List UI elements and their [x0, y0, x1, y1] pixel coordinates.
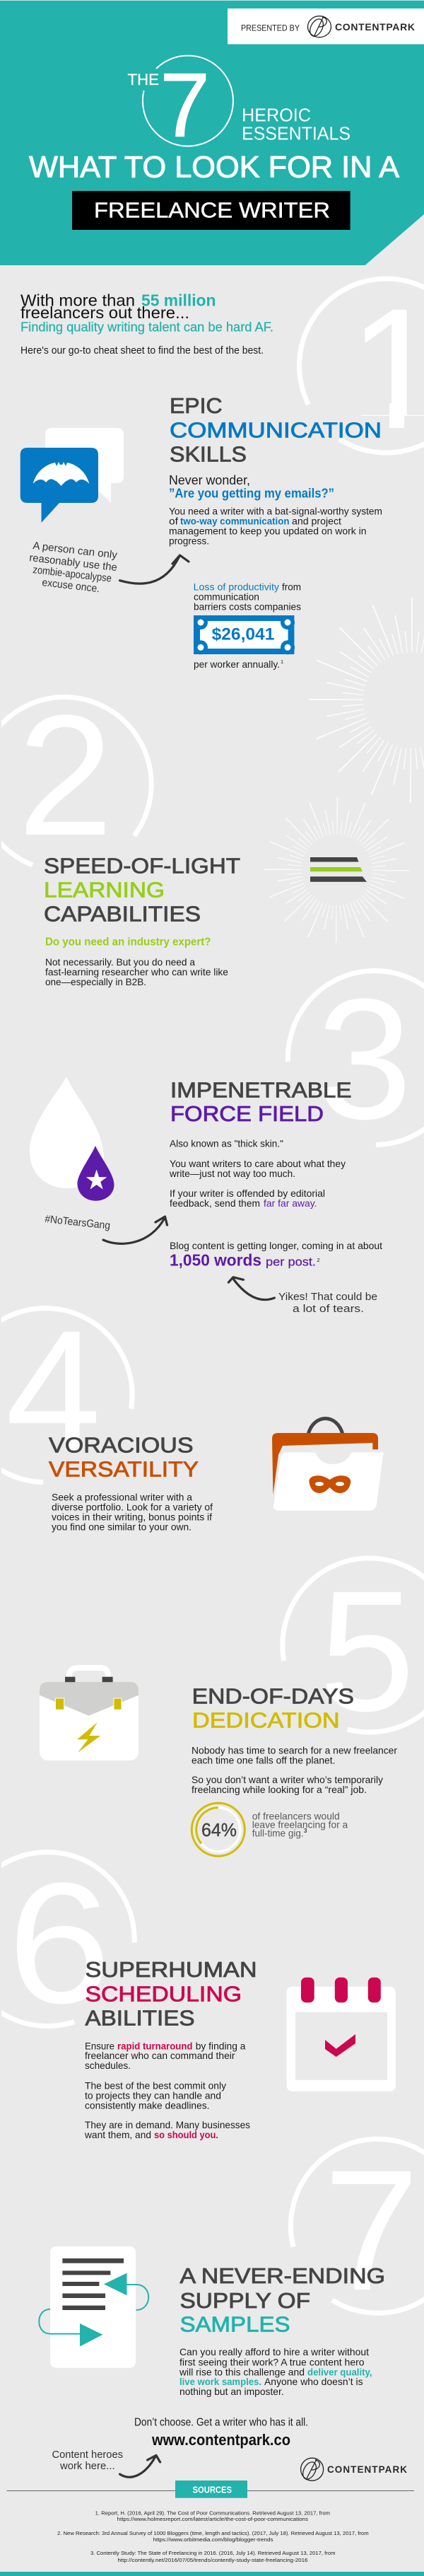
background sunburst two [283, 816, 391, 924]
body text: You need a writer with a bat-signal-worthy system [169, 505, 382, 516]
section 4: voracious versatility [49, 1419, 384, 1533]
heading [170, 393, 382, 466]
heading: SKILLS [170, 441, 247, 466]
source list: https://www.orbitmedia.com/blog/blogger-trends [153, 2536, 273, 2543]
subheading: Never wonder, [169, 473, 250, 487]
stat: blog post length [170, 1240, 382, 1269]
header banner [0, 0, 424, 265]
stat: loss of productivity: from [282, 581, 301, 592]
heading [192, 1683, 354, 1733]
background numeral 5 [283, 1555, 424, 1747]
stat: 64 percent ring: of freelancers would [252, 1811, 340, 1822]
heading: VERSATILITY [49, 1457, 199, 1482]
background sunburst one [336, 625, 424, 775]
intro text: With more than [20, 291, 135, 309]
heading: END-OF-DAYS [192, 1683, 354, 1708]
sources label: SOURCES [192, 2485, 232, 2495]
intro text: 55 million [141, 291, 216, 309]
body text: and project [292, 515, 341, 526]
body text: freelancing while looking for a “real” job. [192, 1784, 367, 1795]
body text [169, 1138, 346, 1209]
icon: speed lines [310, 857, 367, 882]
heading: A NEVER-ENDING [179, 2263, 385, 2288]
call to action [52, 2416, 407, 2481]
body text: Ensure [85, 2040, 114, 2051]
heading: CAPABILITIES [44, 902, 201, 927]
body text: two-way communication [180, 515, 290, 526]
sources [7, 2481, 414, 2563]
body text: you find one similar to your own. [52, 1521, 192, 1533]
body text: far far away. [264, 1197, 317, 1209]
footer bar [0, 2572, 424, 2576]
stat: 64 percent ring [187, 1799, 348, 1860]
heading: VORACIOUS [49, 1432, 194, 1457]
heading [170, 1078, 352, 1126]
body text: of [169, 515, 178, 526]
icon: contentpark logo [307, 16, 331, 38]
body text [179, 2346, 372, 2397]
section 6: superhuman scheduling abilities [84, 1957, 396, 2140]
section 3: impenetrable force field [30, 1077, 382, 1315]
handwritten note [278, 1291, 377, 1315]
body text: consistently make deadlines. [85, 2099, 209, 2111]
title: freelance writer [72, 191, 351, 230]
body text [45, 956, 228, 987]
icon: contentpark logo: CONTENTPARK [327, 2464, 407, 2475]
source list: 1. Report, H. (2016, April 29). The Cost of Poor Communications. Retrieved August 13, 2017, from [95, 2510, 330, 2517]
body text: write—just not way too much. [169, 1168, 295, 1179]
body text: Nobody has time to search for a new freelancer [192, 1744, 397, 1756]
icon: calendar with check mark [287, 1978, 396, 2091]
stat: loss of productivity: communication [194, 591, 259, 602]
presented by badge [228, 8, 424, 44]
handwritten note [29, 540, 118, 595]
body text: Not necessarily. But you do need a [45, 956, 195, 968]
background numeral 6: 6 [7, 1847, 111, 2039]
handwritten note: A person can only [33, 540, 118, 562]
handwritten note: work here... [59, 2460, 115, 2472]
title: freelance writer: FREELANCE WRITER [94, 197, 330, 222]
stat: blog post length: Blog content is getting longer, coming in at about [170, 1240, 382, 1251]
body text: If your writer is offended by editorial [170, 1188, 325, 1199]
intro text: Here's our go-to cheat sheet to find the best of the best. [20, 345, 264, 356]
source list: 3. Contently Study: The State of Freelancing in 2016. (2016, July 14). Retrieved August 13, 2017, from [90, 2550, 335, 2556]
presented by badge: PRESENTED BY [241, 23, 300, 33]
icon: banknote with amount: $26,041 [212, 625, 274, 644]
heading: LEARNING [44, 877, 165, 902]
stat: loss of productivity: per worker annually. [194, 658, 280, 670]
body text: first seeing their work? A true content hero [179, 2357, 365, 2368]
call to action: www.contentpark.co [151, 2431, 290, 2449]
handwritten note: reasonably use the [29, 552, 118, 574]
body text: Also known as "thick skin." [170, 1138, 283, 1149]
handwritten note: zombie-apocalypse [33, 564, 112, 585]
heading: SUPERHUMAN [85, 1957, 257, 1982]
stat: loss of productivity: barriers costs companies [194, 601, 301, 612]
heading: SAMPLES [179, 2311, 290, 2337]
arrow [103, 1217, 167, 1243]
icon: contentpark logo [300, 2458, 407, 2481]
heading: ABILITIES [85, 2006, 195, 2031]
body text: rapid turnaround [117, 2040, 192, 2051]
source list: http://contently.net/2016/07/05/trends/contently-study-state-freelancing-2016 [117, 2557, 308, 2563]
handwritten note: Content heroes [52, 2449, 123, 2461]
body text: one—especially in B2B. [45, 976, 146, 987]
handwritten note: a lot of tears. [293, 1303, 364, 1315]
intro text: Finding quality writing talent can be hard AF. [20, 320, 273, 334]
title: the 7 heroic essentials: THE [127, 71, 159, 88]
body text: The best of the best commit only [85, 2079, 226, 2091]
heading: IMPENETRABLE [170, 1078, 352, 1103]
section 5: end-of-days dedication [40, 1668, 397, 1860]
title: the 7 heroic essentials [127, 55, 351, 156]
background numeral 1 [300, 273, 424, 465]
handwritten note [52, 2449, 123, 2472]
background numeral 4: 4 [6, 1295, 101, 1487]
heading [179, 2263, 385, 2337]
body text [52, 1492, 213, 1533]
title: what to look for in a: WHAT TO LOOK FOR IN A [29, 151, 399, 185]
heading: FORCE FIELD [170, 1101, 324, 1126]
heading: COMMUNICATION [170, 417, 382, 442]
body text: Seek a professional writer with a [52, 1492, 192, 1503]
call to action: Don’t choose. Get a writer who has it all. [134, 2416, 308, 2428]
section 1: epic communication skills [20, 393, 382, 670]
background numeral 3: 3 [317, 963, 412, 1155]
stat: 64 percent ring: 64% [201, 1819, 237, 1840]
body text: will rise to this challenge and [179, 2366, 305, 2377]
body text: each time one falls off the planet. [192, 1754, 335, 1765]
title: the 7 heroic essentials: HEROIC [242, 106, 311, 126]
body text: Anyone who doesn’t is [264, 2376, 363, 2387]
body text: You want writers to care about what they [170, 1158, 346, 1169]
arrow [228, 1277, 274, 1300]
heading: SCHEDULING [85, 1981, 242, 2006]
section 7: a never-ending supply of samples [39, 2246, 385, 2397]
body text: So you don’t want a writer who’s temporarily [192, 1774, 383, 1785]
body text: freelancer who can command their [85, 2050, 235, 2061]
stat: blog post length: 1,050 words [170, 1251, 261, 1269]
icon: document with arrows [39, 2246, 148, 2368]
icon: speech bubbles with bat [20, 428, 124, 523]
intro text: freelancers out there... [20, 303, 189, 322]
body text: They are in demand. Many businesses [85, 2119, 250, 2130]
subheading [169, 473, 334, 500]
stat: blog post length: 2 [317, 1257, 320, 1263]
heading [44, 853, 240, 927]
source list: 2. New Research: 3rd Annual Survey of 1000 Bloggers (time, length and tactics). (2017, July 18). Retrieved August 13, 2017, from [57, 2530, 369, 2536]
heading: SPEED-OF-LIGHT [44, 853, 240, 878]
body text: live work samples. [179, 2376, 261, 2387]
stat: loss of productivity: 1 [281, 658, 283, 665]
heading: EPIC [170, 393, 222, 418]
section 2: speed-of-light learning capabilities [44, 853, 367, 987]
icon: folder with mask [272, 1419, 384, 1511]
stat: loss of productivity: Loss of productivity [194, 581, 279, 592]
body text: voices in their writing, bonus points if [52, 1512, 212, 1523]
source list [57, 2510, 369, 2563]
sources label [175, 2481, 247, 2498]
background numeral 7: 7 [324, 2135, 419, 2326]
stat: 64 percent ring: 3 [304, 1828, 307, 1834]
title: the 7 heroic essentials: 7 [160, 55, 210, 156]
background numeral 2 [0, 680, 151, 871]
icon: banknote with amount [194, 615, 295, 654]
arrow [120, 555, 189, 584]
body text: want them, and [84, 2129, 151, 2140]
subheading: Do you need an industry expert? [45, 936, 211, 948]
body text [84, 2040, 250, 2140]
stat: 64 percent ring: leave freelancing for a [252, 1819, 348, 1831]
handwritten note: Yikes! That could be [278, 1291, 377, 1303]
body text: schedules. [85, 2060, 131, 2071]
heading [49, 1432, 199, 1482]
icon: briefcase with lightning bolt [40, 1668, 139, 1760]
handwritten note: excuse once. [42, 576, 100, 595]
heading: DEDICATION [192, 1708, 340, 1733]
body text: nothing but an imposter. [179, 2386, 284, 2397]
heading: SUPPLY OF [179, 2288, 310, 2313]
stat: loss of productivity [194, 581, 301, 670]
body text: diverse portfolio. Look for a variety of [52, 1502, 213, 1513]
source list: https://www.holmesreport.com/latest/article/the-cost-of-poor-communications [117, 2516, 308, 2522]
body text: by finding a [196, 2040, 246, 2051]
subheading: ”Are you getting my emails?” [169, 486, 334, 500]
body text [169, 505, 382, 546]
body text [192, 1744, 397, 1795]
body text: progress. [169, 535, 209, 546]
body text: so should you. [154, 2129, 218, 2140]
body text: feedback, send them [170, 1197, 260, 1209]
stat: blog post length: per post. [266, 1255, 316, 1268]
body text: Can you really afford to hire a writer without [179, 2346, 369, 2357]
handwritten note: #NoTearsGang [45, 1213, 111, 1232]
presented by badge: CONTENTPARK [335, 21, 415, 33]
background numeral 2: 2 [18, 680, 113, 871]
arrow [120, 2455, 160, 2477]
title: the 7 heroic essentials: ESSENTIALS [242, 124, 351, 144]
heading [85, 1957, 257, 2031]
body text: management to keep you updated on work in [169, 525, 366, 536]
background numeral 5: 5 [319, 1555, 415, 1747]
body text: to projects they can handle and [85, 2089, 221, 2101]
icon: tear drops with star [30, 1077, 114, 1201]
stat: 64 percent ring: full-time gig. [252, 1828, 304, 1839]
body text: fast-learning researcher who can write like [45, 966, 228, 977]
intro text [20, 291, 273, 356]
body text: deliver quality, [307, 2366, 372, 2377]
